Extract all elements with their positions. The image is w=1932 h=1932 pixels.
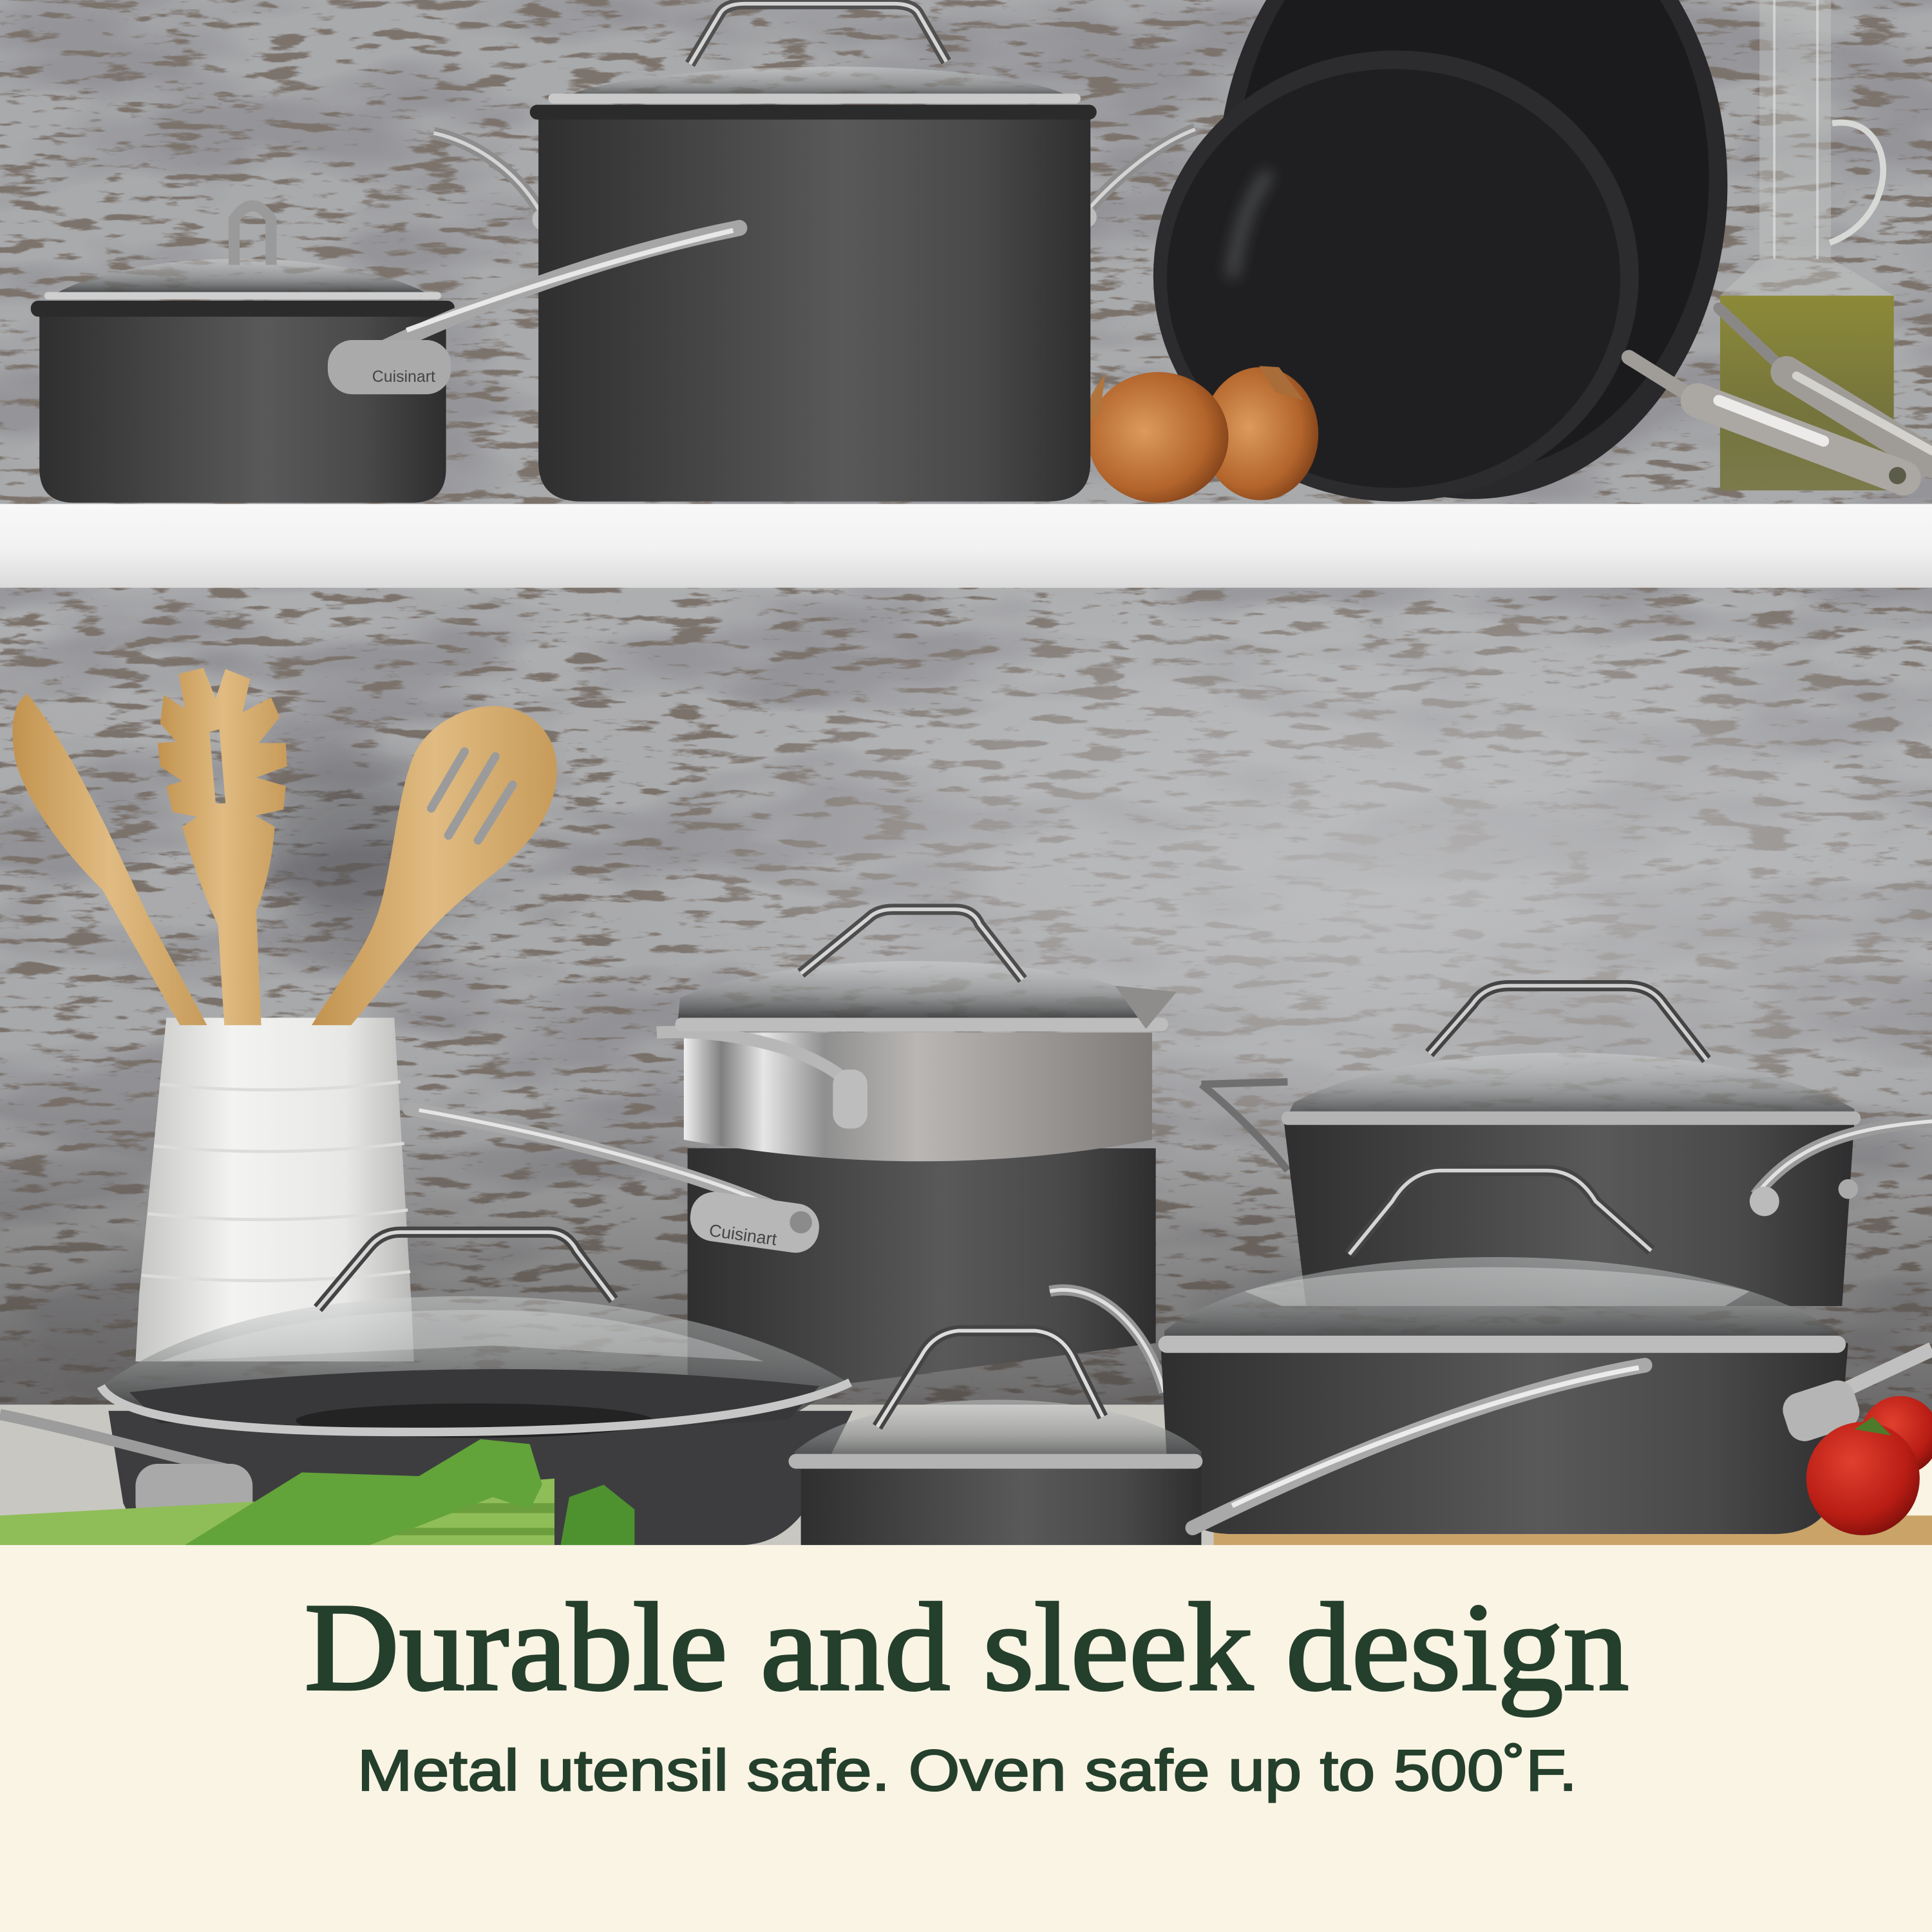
frying pan handles <box>1629 308 1932 484</box>
front small saucepan <box>788 1331 1645 1545</box>
left lidded pan <box>0 1232 853 1545</box>
saute pan <box>1050 1171 1932 1534</box>
onions <box>1084 366 1318 503</box>
white shelf <box>0 504 1932 588</box>
small saucepan <box>31 206 739 503</box>
front frying pan <box>1153 50 1639 502</box>
counter <box>0 1405 1932 1545</box>
tomatoes <box>1806 1396 1932 1535</box>
back frying pan <box>1217 0 1727 499</box>
brand plate text: Cuisinart <box>372 368 435 386</box>
title: Durable and sleek design <box>305 1578 1629 1717</box>
lower marble wall <box>0 588 1932 1426</box>
wooden slotted spoon <box>312 706 557 1025</box>
celery <box>0 1439 634 1545</box>
subtitle: Metal utensil safe. Oven safe up to 500˚F. <box>357 1739 1577 1803</box>
stacked pot with steamer <box>409 909 1177 1405</box>
wooden pasta server <box>158 668 287 1025</box>
cream caption band <box>0 1545 1932 1932</box>
wooden spoon left <box>12 694 207 1025</box>
vase <box>135 1018 414 1361</box>
right covered pot <box>1201 986 1932 1306</box>
stockpot <box>433 4 1195 502</box>
brand plate text: Cuisinart <box>708 1220 779 1249</box>
upper marble wall <box>0 0 1932 505</box>
oil bottle <box>1720 0 1894 490</box>
